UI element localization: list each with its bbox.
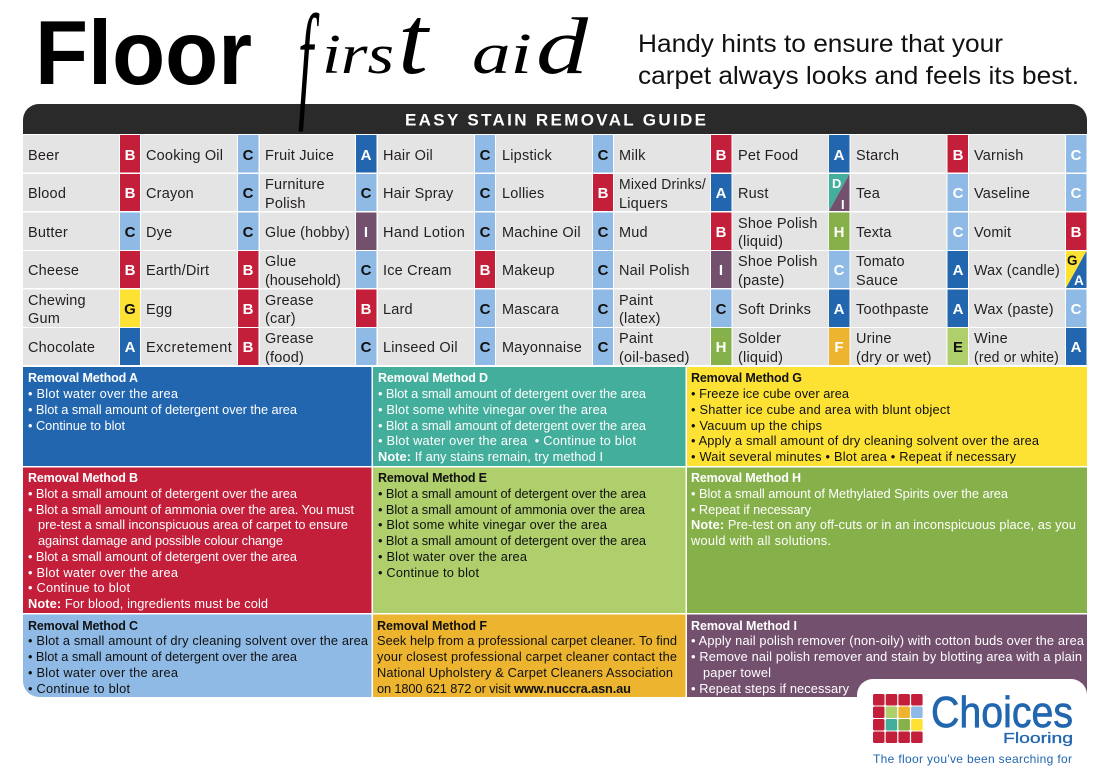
stain column 5: Machine Oil: [502, 225, 581, 241]
panel: removal method G: • Vacuum up the chips: [691, 418, 822, 433]
stain column 6: C: [716, 301, 727, 318]
panel: removal method H: Removal Method H: [691, 471, 801, 485]
title: handwritten first aid: irs: [322, 24, 394, 86]
stain column 8: B: [953, 147, 964, 164]
stain column 5: C: [598, 339, 609, 356]
stain column 3: I: [364, 224, 368, 241]
title: handwritten first aid: [298, 0, 589, 133]
panel: removal method F: your closest professional carpet cleaner contact the: [377, 649, 677, 664]
stain column 2: Earth/Dirt: [146, 263, 209, 279]
stain column 5: C: [598, 301, 609, 318]
stain column 1: Gum: [28, 311, 60, 327]
panel: removal method D: Removal Method D: [378, 371, 488, 385]
logo: Choices Flooring: Choices: [931, 688, 1073, 737]
panel: removal method G: [687, 367, 1087, 466]
stain column 2: [141, 135, 258, 365]
stain column 3: A: [361, 147, 372, 164]
stain column 3: Grease: [265, 331, 314, 347]
stain column 7: D: [832, 176, 841, 191]
panel: removal method C: • Blot a small amount of dry cleaning solvent over the area: [28, 633, 369, 648]
banner: easy stain removal guide: EASY STAIN REMOVAL GUIDE: [405, 110, 706, 130]
stain column 3: C: [361, 339, 372, 356]
stain column 8: (dry or wet): [856, 350, 932, 366]
stain column 6: (latex): [619, 311, 661, 327]
panel: removal method B: pre-test a small inconspicuous area of carpet to ensure: [38, 517, 348, 532]
stain column 6: Mud: [619, 225, 648, 241]
stain column 6: [614, 135, 732, 366]
stain column 6: Mixed Drinks/: [619, 177, 707, 193]
stain column 9: Wax (candle): [974, 263, 1060, 279]
stain column 7: Pet Food: [738, 148, 798, 164]
panel: removal method E: • Blot a small amount of ammonia over the area: [378, 502, 646, 517]
panel: removal method G: • Wait several minutes • Blot area • Repeat if necessary: [691, 449, 1017, 464]
banner: easy stain removal guide: [23, 104, 1087, 134]
stain column 2: Excretement: [146, 340, 232, 356]
panel: removal method B: Removal Method B: [28, 471, 138, 485]
panel: removal method I: [687, 614, 1087, 697]
stain column 7: (liquid): [738, 234, 783, 250]
stain column 3: [260, 135, 376, 366]
panel: removal method F: [373, 614, 686, 697]
stain column 7: (paste): [738, 273, 785, 289]
panel: removal method E: • Blot a small amount of detergent over the area: [378, 533, 647, 548]
panel: removal method E: Removal Method E: [378, 471, 487, 485]
stain column 9: Wax (paste): [974, 302, 1054, 318]
panel: removal method H: Note: Pre-test on any off-cuts or in an inconspicuous place, as you: [691, 517, 1076, 532]
panel: removal method G: • Shatter ice cube and area with blunt object: [691, 402, 950, 417]
stain column 4: Hair Spray: [383, 186, 454, 202]
stain column 4: Hair Oil: [383, 148, 433, 164]
panel: removal method I: • Apply nail polish remover (non-oily) with cotton buds over the area: [691, 633, 1085, 648]
panel: removal method D: Note: If any stains remain, try method I: [378, 449, 603, 464]
stain column 4: C: [480, 339, 491, 356]
stain column 5: [496, 135, 613, 365]
stain column 9: C: [1071, 185, 1082, 202]
logo: Choices Flooring: Flooring: [1003, 730, 1073, 747]
stain column 3: (car): [265, 311, 296, 327]
panel: removal method B: against damage and possible colour change: [38, 533, 283, 548]
panel: removal method F: National Upholstery & Carpet Cleaners Association: [377, 665, 673, 680]
panel: removal method D: [373, 367, 686, 466]
stain column 7: [732, 135, 850, 366]
stain column 1: B: [125, 147, 136, 164]
stain column 3: C: [361, 262, 372, 279]
stain column 8: Starch: [856, 148, 899, 164]
stain column 4: C: [480, 301, 491, 318]
stain column 5: Lollies: [502, 186, 545, 202]
stain column 8: Texta: [856, 225, 892, 241]
stain column 1: Blood: [28, 186, 66, 202]
stain column 9: Vomit: [974, 225, 1011, 241]
stain column 8: E: [953, 339, 963, 356]
stain column 2: Cooking Oil: [146, 148, 223, 164]
stain column 3: (household): [265, 273, 341, 289]
panel: removal method B: [23, 468, 372, 613]
stain column 8: Toothpaste: [856, 302, 929, 318]
stain column 4: Hand Lotion: [383, 225, 465, 241]
stain column 7: Shoe Polish: [738, 216, 818, 232]
stain column 5: C: [598, 224, 609, 241]
panel: removal method B: • Blot water over the area: [28, 565, 179, 580]
stain column 6: H: [716, 339, 726, 356]
panel: removal method E: • Blot water over the area: [378, 549, 528, 564]
logo: Choices Flooring: [857, 679, 1087, 784]
logo: Choices Flooring: The floor you've been searching for: [873, 752, 1072, 766]
stain column 8: Sauce: [856, 273, 898, 289]
stain column 5: Mayonnaise: [502, 340, 582, 356]
panel: removal method I: Removal Method I: [691, 619, 797, 633]
stain column 7: Soft Drinks: [738, 302, 811, 318]
stain column 9: C: [1071, 301, 1082, 318]
panel: removal method D: • Blot a small amount of detergent over the area: [378, 386, 647, 401]
stain column 9: Wine: [974, 331, 1008, 347]
panel: removal method E: • Blot some white vinegar over the area: [378, 517, 608, 532]
panel: removal method A: • Continue to blot: [28, 418, 125, 433]
panel: removal method F: on 1800 621 872 or visit www.nuccra.asn.au: [377, 681, 631, 696]
title: Floor: Floor: [35, 3, 252, 104]
stain column 6: Paint: [619, 293, 653, 309]
stain column 3: C: [361, 185, 372, 202]
panel: removal method C: • Blot water over the area: [28, 665, 179, 680]
panel: removal method C: [23, 614, 372, 697]
panel: removal method G: • Apply a small amount of dry cleaning solvent over the area: [691, 433, 1040, 448]
stain column 8: C: [953, 224, 964, 241]
stain column 4: Ice Cream: [383, 263, 452, 279]
stain column 1: G: [124, 301, 136, 318]
stain column 3: Furniture: [265, 177, 325, 193]
stain column 1: [23, 135, 140, 365]
stain column 1: A: [125, 339, 136, 356]
panel: removal method F: Removal Method F: [377, 619, 487, 633]
stain column 1: Chocolate: [28, 340, 95, 356]
stain column 5: Lipstick: [502, 148, 552, 164]
panel: removal method G: Removal Method G: [691, 371, 802, 385]
panel: removal method C: • Continue to blot: [28, 681, 130, 696]
stain column 7: F: [834, 339, 844, 356]
stain column 5: Mascara: [502, 302, 560, 318]
panel: removal method A: Removal Method A: [28, 371, 138, 385]
stain column 1: Cheese: [28, 263, 79, 279]
stain column 9: Vaseline: [974, 186, 1030, 202]
stain column 4: C: [480, 147, 491, 164]
panel: removal method E: [373, 468, 686, 613]
stain column 2: Crayon: [146, 186, 194, 202]
stain column 1: C: [125, 224, 136, 241]
stain column 8: C: [953, 185, 964, 202]
logo mark: coloured tile grid: [873, 694, 923, 743]
panel: removal method F: Seek help from a professional carpet cleaner. To find: [377, 633, 677, 648]
title: handwritten first aid: ai: [472, 21, 532, 86]
stain column 2: B: [243, 262, 254, 279]
stain column 9: C: [1071, 147, 1082, 164]
stain column 6: Milk: [619, 148, 646, 164]
panel: removal method C: Removal Method C: [28, 619, 138, 633]
panel: removal method H: • Repeat if necessary: [691, 502, 812, 517]
stain column 2: Dye: [146, 225, 172, 241]
subtitle: Handy hints to ensure that your: [638, 30, 1003, 58]
panel: removal method D: • Blot a small amount of detergent over the area: [378, 418, 647, 433]
stain column 9: A: [1071, 339, 1082, 356]
title: handwritten first aid: d: [536, 2, 589, 91]
stain column 1: Chewing: [28, 293, 86, 309]
stain column 4: [378, 135, 495, 365]
stain column 8: A: [953, 301, 964, 318]
stain column 2: C: [243, 147, 254, 164]
panel: removal method H: • Blot a small amount of Methylated Spirits over the area: [691, 486, 1009, 501]
stain column 2: B: [243, 301, 254, 318]
stain column 1: Beer: [28, 148, 59, 164]
panel: removal method I: • Remove nail polish remover and stain by blotting area with a plain: [691, 649, 1082, 664]
panel: removal method A: • Blot water over the area: [28, 386, 179, 401]
stain column 5: C: [598, 147, 609, 164]
stain column 6: A: [716, 185, 727, 202]
stain column 6: Liquers: [619, 196, 668, 212]
panel: removal method A: [23, 367, 372, 466]
stain column 6: (oil-based): [619, 350, 690, 366]
stain column 9: A: [1074, 273, 1084, 288]
panel: removal method B: • Blot a small amount of ammonia over the area. You must: [28, 502, 354, 517]
stain column 4: Lard: [383, 302, 413, 318]
stain column 1: Butter: [28, 225, 68, 241]
stain column 3: (food): [265, 350, 304, 366]
stain column 2: Egg: [146, 302, 172, 318]
panel: removal method B: • Blot a small amount of detergent over the area: [28, 549, 298, 564]
stain column 7: A: [834, 147, 845, 164]
stain column 4: B: [480, 262, 491, 279]
stain column 2: C: [243, 185, 254, 202]
stain column 3: B: [361, 301, 372, 318]
stain column 9: (red or white): [974, 350, 1059, 366]
stain column 7: Rust: [738, 186, 769, 202]
stain column 7: I: [841, 197, 845, 212]
panel: removal method H: would with all solutions.: [690, 533, 831, 548]
stain column 9: B: [1071, 224, 1082, 241]
stain column 3: Polish: [265, 196, 306, 212]
panel: removal method I: • Repeat steps if necessary: [691, 681, 850, 696]
stain column 6: B: [716, 224, 727, 241]
stain column 5: C: [598, 262, 609, 279]
stain column 5: B: [598, 185, 609, 202]
subtitle: [638, 30, 1079, 90]
stain column 5: Makeup: [502, 263, 555, 279]
stain column 7: (liquid): [738, 350, 783, 366]
stain column 7: H: [834, 224, 844, 241]
panel: removal method I: paper towel: [703, 665, 771, 680]
stain column 8: Urine: [856, 331, 892, 347]
stain column 7: Shoe Polish: [738, 254, 818, 270]
stain column 2: C: [243, 224, 254, 241]
panel: removal method B: • Blot a small amount of detergent over the area: [28, 486, 298, 501]
panel: removal method A: • Blot a small amount of detergent over the area: [28, 402, 298, 417]
panel: removal method C: • Blot a small amount of detergent over the area: [28, 649, 298, 664]
stain column 3: Grease: [265, 293, 314, 309]
stain column 4: Linseed Oil: [383, 340, 458, 356]
panel: removal method B: • Continue to blot: [28, 580, 130, 595]
stain column 6: B: [716, 147, 727, 164]
panel: removal method E: • Blot a small amount of detergent over the area: [378, 486, 647, 501]
panel: removal method B: Note: For blood, ingredients must be cold: [28, 596, 268, 611]
panel: removal method E: • Continue to blot: [378, 565, 479, 580]
stain column 7: A: [834, 301, 845, 318]
panel: removal method H: [687, 468, 1087, 613]
panel: removal method D: • Blot water over the area • Continue to blot: [378, 433, 636, 448]
stain column 6: I: [719, 262, 723, 279]
stain column 9: Varnish: [974, 148, 1024, 164]
stain column 8: Tea: [856, 186, 881, 202]
stain column 6: Paint: [619, 331, 653, 347]
stain column 9: G: [1067, 253, 1078, 268]
stain column 1: B: [125, 185, 136, 202]
stain column 8: [850, 135, 968, 366]
panel: removal method G: • Freeze ice cube over area: [691, 386, 850, 401]
stain column 6: Nail Polish: [619, 263, 690, 279]
stain column 7: C: [834, 262, 845, 279]
stain column 4: C: [480, 185, 491, 202]
stain column 9: [969, 135, 1086, 366]
stain column 8: A: [953, 262, 964, 279]
stain column 3: Glue: [265, 254, 296, 270]
stain column 7: Solder: [738, 331, 781, 347]
stain column 2: B: [243, 339, 254, 356]
stain column 3: Glue (hobby): [265, 225, 350, 241]
panel: removal method D: • Blot some white vinegar over the area: [378, 402, 608, 417]
subtitle: carpet always looks and feels its best.: [638, 62, 1079, 90]
stain column 8: Tomato: [856, 254, 905, 270]
stain column 1: B: [125, 262, 136, 279]
stain column 4: C: [480, 224, 491, 241]
stain column 3: Fruit Juice: [265, 148, 334, 164]
